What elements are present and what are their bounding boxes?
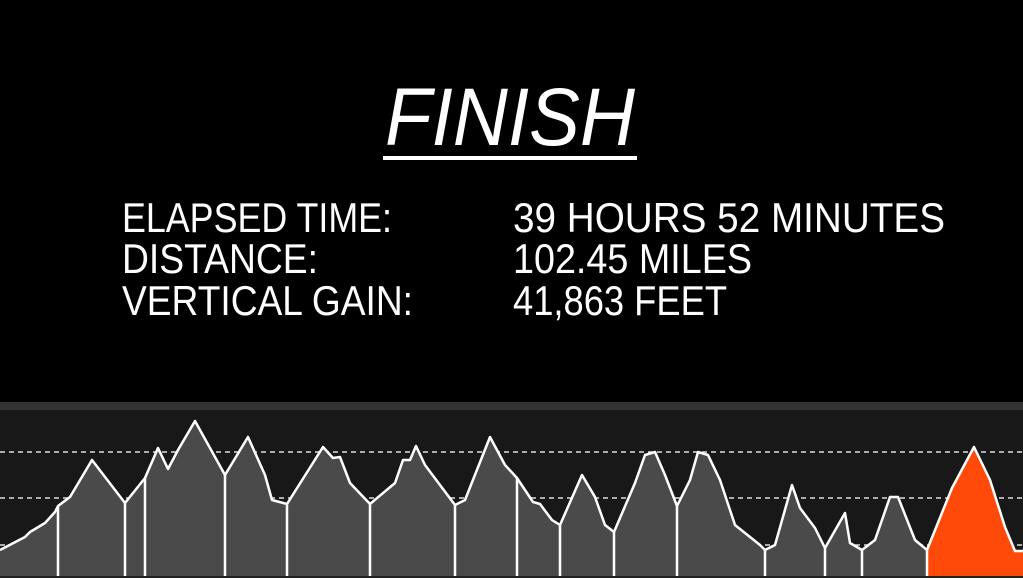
title: FINISH xyxy=(385,72,636,163)
stat: distance: 102.45 MILES xyxy=(513,235,752,282)
stats block xyxy=(122,194,945,324)
stat: elapsed time xyxy=(122,194,945,241)
stat: distance xyxy=(122,235,752,282)
stat: distance: DISTANCE: xyxy=(122,235,318,282)
stat: vertical gain xyxy=(122,277,727,324)
final segment highlighted xyxy=(927,447,1023,578)
profile fill xyxy=(0,421,927,578)
stat: vertical gain: VERTICAL GAIN: xyxy=(122,277,413,324)
elevation profile chart xyxy=(0,402,1023,578)
stat: elapsed time: 39 HOURS 52 MINUTES xyxy=(513,194,945,241)
stat: vertical gain: 41,863 FEET xyxy=(513,277,727,324)
stat: elapsed time: ELAPSED TIME: xyxy=(122,194,392,241)
